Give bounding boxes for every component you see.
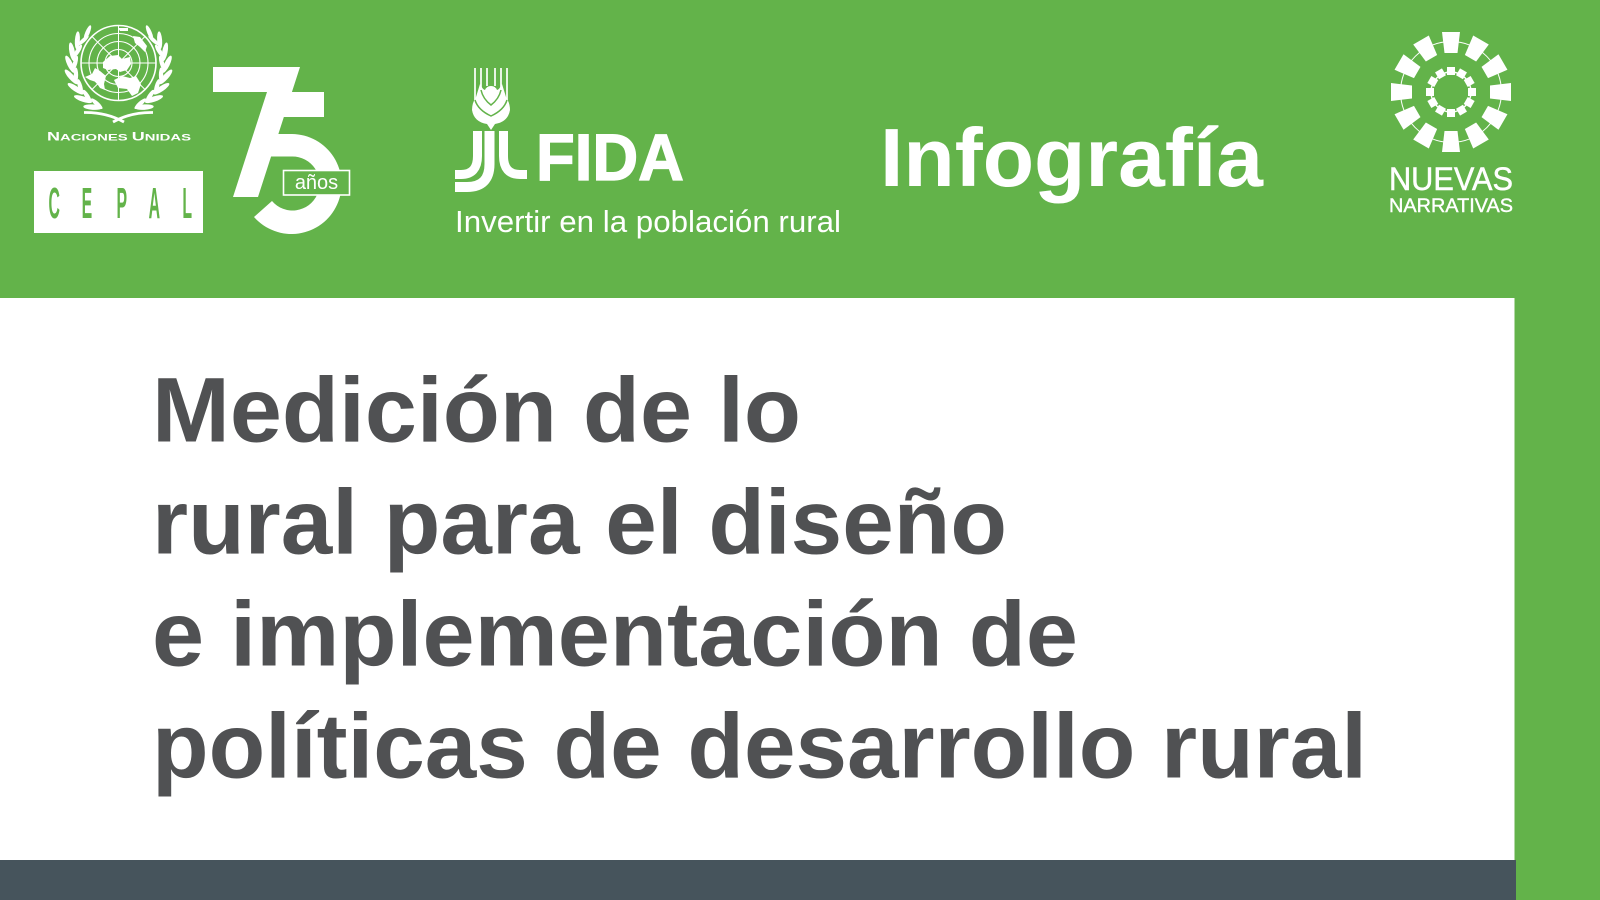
logo: Nuevas Narrativas	[1389, 32, 1513, 217]
logo: 75 años: años	[295, 172, 338, 194]
wordmark: NARRATIVAS: NARRATIVAS	[1389, 196, 1513, 217]
wordmark: NUEVAS: NUEVAS	[1389, 161, 1513, 197]
logo: CEPAL	[34, 171, 203, 233]
title: e implementación de	[152, 584, 1078, 686]
icon: JJL mark	[455, 131, 527, 187]
title: Medición de lo	[152, 360, 801, 462]
icon: wheat ear	[472, 68, 510, 130]
icon: segmented rings	[1391, 32, 1511, 152]
title: políticas de desarrollo rural	[152, 696, 1367, 798]
logo: CEPAL: CEPAL	[48, 179, 192, 229]
wordmark: FIDA: FIDA	[536, 120, 684, 194]
title	[152, 360, 1367, 798]
logo: FIDA	[455, 68, 841, 239]
panel: dark footer band	[0, 860, 1516, 900]
panel: white title panel	[0, 298, 1514, 860]
label: Naciones Unidas: N ACIONES U NIDAS	[47, 132, 191, 144]
logo: 75 años	[213, 67, 350, 234]
title: rural para el diseño	[152, 472, 1007, 574]
tagline: Invertir en la población rural	[455, 204, 841, 239]
heading: Infografía: Infografía	[880, 111, 1264, 204]
logo: United Nations emblem	[63, 24, 174, 122]
